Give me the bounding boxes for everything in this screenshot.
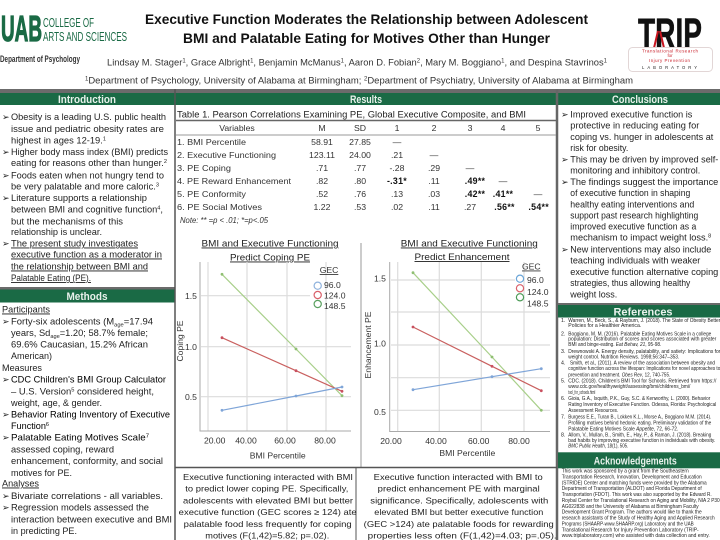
heading: references: References bbox=[614, 306, 672, 318]
text block: methods content bbox=[2, 304, 172, 536]
text block: methods content: Measures bbox=[2, 363, 42, 373]
title: Executive Function Moderates the Relationship between Adolescent bbox=[145, 11, 588, 27]
table: Pearson correlations: 1 bbox=[395, 123, 400, 133]
logo: UAB College of Arts and Sciences: COLLEGE OF bbox=[43, 15, 94, 30]
table: Pearson correlations: 58.91 bbox=[311, 137, 333, 147]
table: Pearson correlations: — bbox=[499, 176, 508, 186]
chart: enhancement PE: 0.5 bbox=[374, 407, 386, 417]
text block: reference list: Assessment Resources. bbox=[568, 408, 618, 414]
text block: introduction bullets: relationship is unclear. bbox=[11, 227, 102, 237]
chart: enhancement PE: Predict Enhancement bbox=[414, 252, 510, 262]
text block: enhancement interaction finding: predict enhancement PE with marginal bbox=[378, 484, 540, 494]
text block: methods content: Analyses bbox=[2, 478, 39, 488]
text block: methods content: ➢ bbox=[2, 376, 10, 386]
table: Pearson correlations: .41** bbox=[493, 189, 514, 199]
logo: TRIP laboratory: LABORATORY bbox=[642, 65, 697, 70]
table: Pearson correlations: .56** bbox=[494, 202, 515, 212]
text block: conclusions bullets: protective in reducing eating for bbox=[570, 120, 699, 130]
text block: methods content: age bbox=[50, 334, 60, 340]
table: Pearson correlations: .76 bbox=[354, 189, 366, 199]
table: Pearson correlations: .49** bbox=[465, 176, 486, 186]
authors: , Mary M. Boggiano bbox=[420, 56, 501, 68]
authors: , Grace Albright bbox=[186, 56, 250, 68]
chart: enhancement PE: Enhancement PE bbox=[363, 311, 373, 378]
logo: TRIP laboratory: for bbox=[667, 53, 673, 58]
text block: reference list: 7. bbox=[561, 415, 565, 421]
text block: introduction bullets: eating for reasons other than hunger. bbox=[11, 158, 160, 168]
text block: acknowledgements: Development Grant Program. The authors would like to thank the bbox=[562, 510, 702, 516]
text block: methods content: Forty-six adolescents (M bbox=[11, 316, 110, 326]
table: Pearson correlations: 6. PE Social Motives bbox=[177, 202, 262, 212]
text block: reference list bbox=[561, 318, 720, 450]
chart: enhancement PE: 20.00 bbox=[380, 436, 402, 446]
text block: methods content: ➢ bbox=[2, 318, 10, 328]
text block: methods content: interaction between executive and BMI bbox=[11, 514, 172, 524]
text block: reference list: 4. bbox=[561, 361, 565, 367]
text block: reference list: www.cdc.gov/healthyweight/assessing/bmi/childrens_bmi/ bbox=[568, 384, 691, 390]
text block: introduction bullets: Higher body mass index (BMI) predicts bbox=[11, 147, 168, 157]
text block: introduction bullets: the relationship between BMI and bbox=[11, 262, 148, 272]
text block: acknowledgements: AG022838 and the University of Alabama at Birmingham Faculty bbox=[562, 504, 699, 510]
text block: conclusions bullets: Improved executive function is bbox=[570, 110, 693, 120]
authors: 1 bbox=[250, 58, 254, 64]
text block: methods content: Behavior Rating Inventory of Executive bbox=[11, 410, 170, 420]
text block: conclusions bullets: ➢ bbox=[561, 110, 569, 120]
chart: enhancement PE: 40.00 bbox=[425, 436, 447, 446]
text block: acknowledgements: Programs (SHAARP-www.SHAARP.org) Laboratory and the UAB bbox=[562, 522, 694, 528]
text block: coping interaction finding bbox=[179, 472, 357, 540]
text block: introduction bullets: ➢ bbox=[2, 172, 10, 182]
title bbox=[145, 11, 588, 46]
text block: methods content: Palatable Eating Motives Scale bbox=[11, 432, 136, 442]
text block: reference list: tool_for_schools.html bbox=[568, 390, 595, 396]
table: Pearson correlations: 27.85 bbox=[349, 137, 371, 147]
text block: methods content: ➢ bbox=[2, 410, 10, 420]
table: Pearson correlations: .52 bbox=[316, 189, 328, 199]
logo: UAB College of Arts and Sciences: Department of Psychology bbox=[0, 54, 80, 65]
affiliations: Department of Psychology, University of Alabama at Birmingham; bbox=[88, 74, 364, 86]
chart: enhancement PE: 60.00 bbox=[468, 436, 490, 446]
table: Pearson correlations: 3 bbox=[468, 123, 473, 133]
panel: references bbox=[558, 303, 720, 450]
chart: coping PE: 80.00 bbox=[314, 436, 336, 446]
text block: conclusions bullets: support past research highlighting bbox=[570, 210, 698, 220]
text block: enhancement interaction finding: (GEC >124) ate palatable foods for rewarding bbox=[364, 519, 554, 529]
legend: GEC: GEC bbox=[522, 262, 541, 272]
legend: GEC: 148.5 bbox=[324, 301, 346, 311]
authors: 1 bbox=[501, 58, 505, 64]
chart: enhancement PE: BMI and Executive Functioning bbox=[401, 238, 538, 248]
legend: GEC: 124.0 bbox=[527, 287, 549, 297]
legend: GEC: 124.0 bbox=[324, 290, 346, 300]
authors: 1 bbox=[182, 58, 186, 64]
chart: enhancement PE: 1.0 bbox=[374, 338, 386, 348]
chart: enhancement PE: BMI Percentile bbox=[439, 448, 495, 458]
text block: coping interaction finding: motives (F(1,42)=5.82; p=.02). bbox=[205, 530, 329, 540]
text block: methods content: Participants bbox=[2, 304, 50, 314]
chart: coping PE: BMI Percentile bbox=[250, 450, 306, 460]
table: Pearson correlations: -.28 bbox=[390, 163, 405, 173]
text block: reference list: prevention and treatment. Obes Rev, 12, 740-755. bbox=[568, 373, 670, 379]
logo: TRIP laboratory: Translational Research bbox=[642, 48, 699, 54]
text block: reference list: Palatable Eating Motives Scale Appetite, 72, 66-72. bbox=[568, 426, 678, 432]
text block: reference list: Policies for a Healthier America. bbox=[568, 323, 641, 329]
text block: introduction bullets: 2 bbox=[164, 159, 167, 165]
text block: reference list: BMC Public Health, 18(1), 505. bbox=[568, 444, 628, 450]
text block: methods content: ➢ bbox=[2, 504, 10, 514]
authors: , Aaron D. Fobian bbox=[344, 56, 417, 68]
legend: GEC: GEC bbox=[320, 265, 338, 275]
text block: methods content: assessed coping, reward bbox=[11, 444, 114, 454]
table: Pearson correlations: 1. BMI Percentile bbox=[177, 137, 246, 147]
legend: GEC: 96.0 bbox=[324, 280, 341, 290]
heading: results: Results bbox=[350, 94, 382, 106]
chart: coping PE bbox=[175, 238, 351, 460]
text block: conclusions bullets: coping vs. hunger in adolescents at bbox=[570, 132, 714, 142]
table: Pearson correlations: 4. PE Reward Enhancement bbox=[177, 176, 292, 186]
text block: acknowledgements: This work was sponsored by a grant from the Southeastern bbox=[562, 468, 689, 474]
table: Pearson correlations: Variables bbox=[219, 123, 255, 133]
text block: introduction bullets: be very palatable and more caloric. bbox=[11, 182, 153, 192]
text block: enhancement interaction finding bbox=[364, 472, 557, 540]
table note: Note: ** =p < .01; *=p<.05 bbox=[180, 216, 269, 225]
text block: acknowledgements: (STRIDE) Center and matching funds were provided by the Alabama bbox=[562, 480, 707, 486]
text block: introduction bullets: Palatable Eating (PE). bbox=[11, 273, 91, 283]
table: Pearson correlations: — bbox=[466, 163, 475, 173]
authors: 1 bbox=[341, 58, 345, 64]
text block: introduction bullets: ➢ bbox=[2, 113, 10, 123]
table: Pearson correlations: .54** bbox=[528, 202, 549, 212]
logo: UAB College of Arts and Sciences: UAB bbox=[1, 8, 42, 49]
text block: introduction bullets: executive function as a moderator in bbox=[11, 250, 162, 260]
text block: coping interaction finding: adolescents with elevated BMI but better bbox=[183, 495, 353, 505]
panel: introduction bbox=[0, 93, 720, 283]
text block: introduction bullets: 4 bbox=[157, 206, 160, 212]
text block: introduction bullets: The present study investigates bbox=[11, 238, 138, 248]
text block: conclusions bullets: monitoring and inhibitory control. bbox=[570, 166, 700, 176]
legend: GEC: 96.0 bbox=[527, 275, 544, 285]
text block: introduction bullets: highest in ages 12-19. bbox=[11, 136, 100, 146]
text block: methods content: ➢ bbox=[2, 492, 10, 502]
panel: results bbox=[175, 94, 557, 540]
table: Pearson correlations: 24.00 bbox=[349, 150, 371, 160]
table: Pearson correlations: — bbox=[393, 137, 402, 147]
table: Pearson correlations: M bbox=[318, 123, 326, 133]
text block: introduction bullets: 1 bbox=[103, 136, 106, 142]
authors: 1 bbox=[604, 58, 608, 64]
table: Pearson correlations bbox=[176, 110, 556, 212]
chart: enhancement PE: 1.5 bbox=[374, 274, 386, 284]
table: Pearson correlations: — bbox=[430, 150, 439, 160]
text block: enhancement interaction finding: properties less often (F(1,42)=4.03; p=.05). bbox=[368, 530, 557, 540]
text block: conclusions bullets: healthy eating interventions and bbox=[570, 200, 694, 210]
table: Pearson correlations: SD bbox=[354, 123, 366, 133]
chart: coping PE: 0.5 bbox=[185, 392, 197, 402]
table: Pearson correlations: .53 bbox=[354, 202, 366, 212]
text block: conclusions bullets: of executive function in shaping bbox=[570, 188, 690, 198]
logo: TRIP laboratory: Injury Prevention bbox=[649, 58, 691, 63]
text block: methods content: weight, age, & gender. bbox=[10, 398, 102, 408]
text block: conclusions bullets: This may be driven by improved self- bbox=[570, 154, 718, 164]
text block: conclusions bullets: ➢ bbox=[561, 178, 569, 188]
text block: methods content: Regression models assessed the bbox=[11, 502, 149, 512]
table: Pearson correlations: 4 bbox=[501, 123, 506, 133]
text block: methods content: 69.6% Caucasian, 15.2% African bbox=[11, 340, 148, 350]
text block: enhancement interaction finding: Executive function interacted with BMI to bbox=[374, 472, 543, 482]
text block: methods content: American) bbox=[11, 351, 52, 361]
text block: methods content: – U.S. Version bbox=[11, 386, 69, 396]
table: Pearson correlations: -.31* bbox=[387, 176, 407, 186]
legend: GEC bbox=[516, 262, 549, 308]
table: Pearson correlations: 3. PE Coping bbox=[177, 163, 231, 173]
text block: introduction bullets: 3 bbox=[156, 182, 159, 188]
heading: methods: Methods bbox=[66, 291, 108, 303]
text block: coping interaction finding: Executive functioning interacted with BMI bbox=[183, 472, 353, 482]
table: Pearson correlations: .13 bbox=[391, 189, 403, 199]
chart: coping PE: 20.00 bbox=[204, 436, 226, 446]
text block: coping interaction finding: executive function (GEC scores ≥ 124) ate bbox=[179, 507, 357, 517]
text block: methods content: 7 bbox=[146, 434, 149, 440]
table: Pearson correlations: 123.11 bbox=[309, 150, 335, 160]
text block: reference list: 5. bbox=[561, 379, 565, 385]
text block: reference list: 6. bbox=[561, 396, 565, 402]
affiliations: 1 bbox=[85, 76, 89, 82]
text block: methods content: ➢ bbox=[2, 434, 10, 444]
logo: TRIP laboratory bbox=[628, 10, 712, 72]
table: Pearson correlations: .27 bbox=[464, 202, 476, 212]
text block: acknowledgements: Department of Transportation (ALDOT) and Florida Department of bbox=[562, 486, 702, 492]
table: Pearson correlations: .71 bbox=[316, 163, 328, 173]
table: Pearson correlations: .03 bbox=[428, 189, 440, 199]
text block: methods content: years, Sd bbox=[11, 328, 49, 338]
authors: , and Despina Stavrinos bbox=[504, 56, 604, 68]
text block: acknowledgements: www.triplaboratory.com) who assisted with data collection and entry. bbox=[562, 533, 710, 539]
table: Pearson correlations: .82 bbox=[316, 176, 328, 186]
table: Pearson correlations: .11 bbox=[428, 202, 440, 212]
text block: conclusions bullets: ➢ bbox=[561, 156, 569, 166]
text block: conclusions bullets: strategies, thus allowing healthy bbox=[570, 278, 691, 288]
legend: GEC bbox=[314, 265, 346, 311]
text block: introduction bullets: but the mechanisms of this bbox=[11, 216, 123, 226]
chart: coping PE: 1.5 bbox=[185, 291, 197, 301]
text block: introduction bullets: ➢ bbox=[2, 194, 10, 204]
table: Pearson correlations: .29 bbox=[428, 163, 440, 173]
header bbox=[0, 8, 712, 86]
chart: coping PE: 60.00 bbox=[274, 436, 296, 446]
authors: Lindsay M. Stager bbox=[107, 56, 183, 68]
text block: introduction bullets: ➢ bbox=[2, 240, 10, 250]
text block: methods content: =1.20; 58.7% female; bbox=[60, 328, 148, 338]
heading: introduction: Introduction bbox=[58, 94, 116, 106]
text block: acknowledgements: Transportation Research, Innovation, Development and Education bbox=[562, 474, 702, 480]
text block: introduction bullets: Obesity is a leading U.S. public health bbox=[11, 112, 166, 122]
text block: introduction bullets bbox=[2, 112, 168, 283]
text block: methods content: =17.94 bbox=[124, 316, 153, 326]
table: Pearson correlations: Table 1. Pearson Correlations Examining PE, Global Executive Composite, and BMI bbox=[177, 110, 526, 120]
table: Pearson correlations: .42** bbox=[465, 189, 486, 199]
text block: acknowledgements: Translational Research for Injury Prevention Laboratory (TRIP- bbox=[562, 528, 699, 534]
text block: conclusions bullets: The findings suggest the importance bbox=[570, 177, 718, 187]
panel: acknowledgements bbox=[558, 452, 720, 539]
text block: conclusions bullets: 8 bbox=[708, 234, 711, 240]
chart: enhancement PE bbox=[363, 238, 550, 458]
text block: reference list: Boggiano, M. M. (2016). Palatable Eating Motives Scale in a college bbox=[568, 331, 711, 337]
chart: coping PE: Coping PE bbox=[175, 320, 185, 362]
table: Pearson correlations: 5. PE Conformity bbox=[177, 189, 247, 199]
table: Pearson correlations: 5 bbox=[536, 123, 541, 133]
text block: methods content: considered height, bbox=[74, 386, 154, 396]
authors: 2 bbox=[417, 58, 421, 64]
text block: conclusions bullets: risk for obesity. bbox=[570, 143, 628, 153]
table: Pearson correlations: .80 bbox=[354, 176, 366, 186]
text block: methods content: enhancement, conformity, and social bbox=[11, 456, 163, 466]
text block: acknowledgements bbox=[562, 468, 720, 539]
text block: conclusions bullets: New interventions may also include bbox=[570, 244, 711, 254]
text block: introduction bullets: Literature supports a relationship bbox=[11, 193, 147, 203]
panel: methods bbox=[0, 287, 175, 536]
text block: conclusions bullets: teaching individuals with weaker bbox=[570, 256, 700, 266]
table: Pearson correlations: .21 bbox=[391, 150, 403, 160]
text block: methods content: Function bbox=[11, 421, 46, 431]
text block: conclusions bullets: ➢ bbox=[561, 246, 569, 256]
text block: enhancement interaction finding: significance. Specifically, adolescents with bbox=[370, 495, 549, 505]
text block: methods content: CDC Children's BMI Group Calculator bbox=[11, 374, 166, 384]
text block: conclusions bullets: weight loss. bbox=[569, 290, 617, 300]
affiliations: 2 bbox=[364, 76, 368, 82]
chart: coping PE: BMI and Executive Functioning bbox=[202, 238, 338, 248]
table: Pearson correlations: .02 bbox=[391, 202, 403, 212]
table: Pearson correlations: 2 bbox=[432, 123, 437, 133]
text block: introduction bullets: , bbox=[160, 204, 163, 214]
text block: conclusions bullets bbox=[561, 110, 718, 300]
text block: reference list: weight control. Nutrition Reviews. 1998;56:347–353. bbox=[568, 355, 679, 361]
text block: introduction bullets: Foods eaten when not hungry tend to bbox=[11, 170, 164, 180]
text block: methods content: motives for PE. bbox=[11, 468, 72, 478]
text block: coping interaction finding: palatable food less frequently for coping bbox=[184, 519, 352, 529]
text block: conclusions bullets: executive function alternative coping bbox=[570, 267, 718, 277]
table: Pearson correlations: 1.22 bbox=[314, 202, 331, 212]
heading: acknowledgements: Acknowledgements bbox=[594, 456, 677, 468]
text block: conclusions bullets: improved executive function as a bbox=[570, 222, 697, 232]
text block: reference list: BMI and binge-eating. Eat Behav, 21, 95-98. bbox=[568, 342, 661, 348]
logo: UAB College of Arts and Sciences: ARTS AND SCIENCES bbox=[43, 29, 127, 44]
text block: enhancement interaction finding: elevated BMI but better executive function bbox=[374, 507, 544, 517]
text block: reference list: 1. bbox=[561, 318, 565, 324]
table: Pearson correlations: — bbox=[534, 189, 543, 199]
logo: UAB College of Arts and Sciences bbox=[0, 8, 127, 65]
text block: methods content: Bivariate correlations - all variables. bbox=[11, 491, 163, 501]
legend: GEC: 148.5 bbox=[527, 298, 549, 308]
panel: conclusions bbox=[561, 94, 718, 300]
text block: methods content: in predicting PE. bbox=[11, 526, 77, 536]
text block: reference list: 3. bbox=[561, 349, 565, 355]
table: Pearson correlations: 2. Executive Functioning bbox=[177, 150, 276, 160]
table: Pearson correlations: .11 bbox=[428, 176, 440, 186]
text block: coping interaction finding: to predict lower coping PE. Specifically, bbox=[185, 484, 348, 494]
text block: reference list: 2. bbox=[561, 331, 565, 337]
chart: coping PE: 40.00 bbox=[235, 436, 257, 446]
text block: conclusions bullets: mechanism to impact weight loss. bbox=[570, 232, 706, 242]
text block: introduction bullets: ➢ bbox=[2, 148, 10, 158]
authors: , Benjamin McManus bbox=[253, 56, 341, 68]
heading: conclusions: Conclusions bbox=[612, 94, 668, 106]
text block: reference list: 8. bbox=[561, 432, 565, 438]
chart: coping PE: Predict Coping PE bbox=[230, 252, 310, 262]
text block: methods content: age bbox=[114, 322, 124, 328]
chart: enhancement PE: 80.00 bbox=[508, 436, 530, 446]
text block: methods content: 5 bbox=[71, 388, 74, 394]
text block: introduction bullets: between BMI and cognitive function bbox=[11, 204, 155, 214]
chart: coping PE: 1.0 bbox=[185, 342, 197, 352]
title: BMI and Palatable Eating for Motives Other than Hunger bbox=[183, 30, 551, 46]
table: Pearson correlations: .77 bbox=[354, 163, 366, 173]
text block: methods content: 6 bbox=[46, 422, 49, 428]
text block: introduction bullets: issue and pediatric obesity rates are bbox=[11, 124, 164, 134]
affiliations: Department of Psychiatry, University of Alabama at Birmingham bbox=[367, 74, 633, 86]
